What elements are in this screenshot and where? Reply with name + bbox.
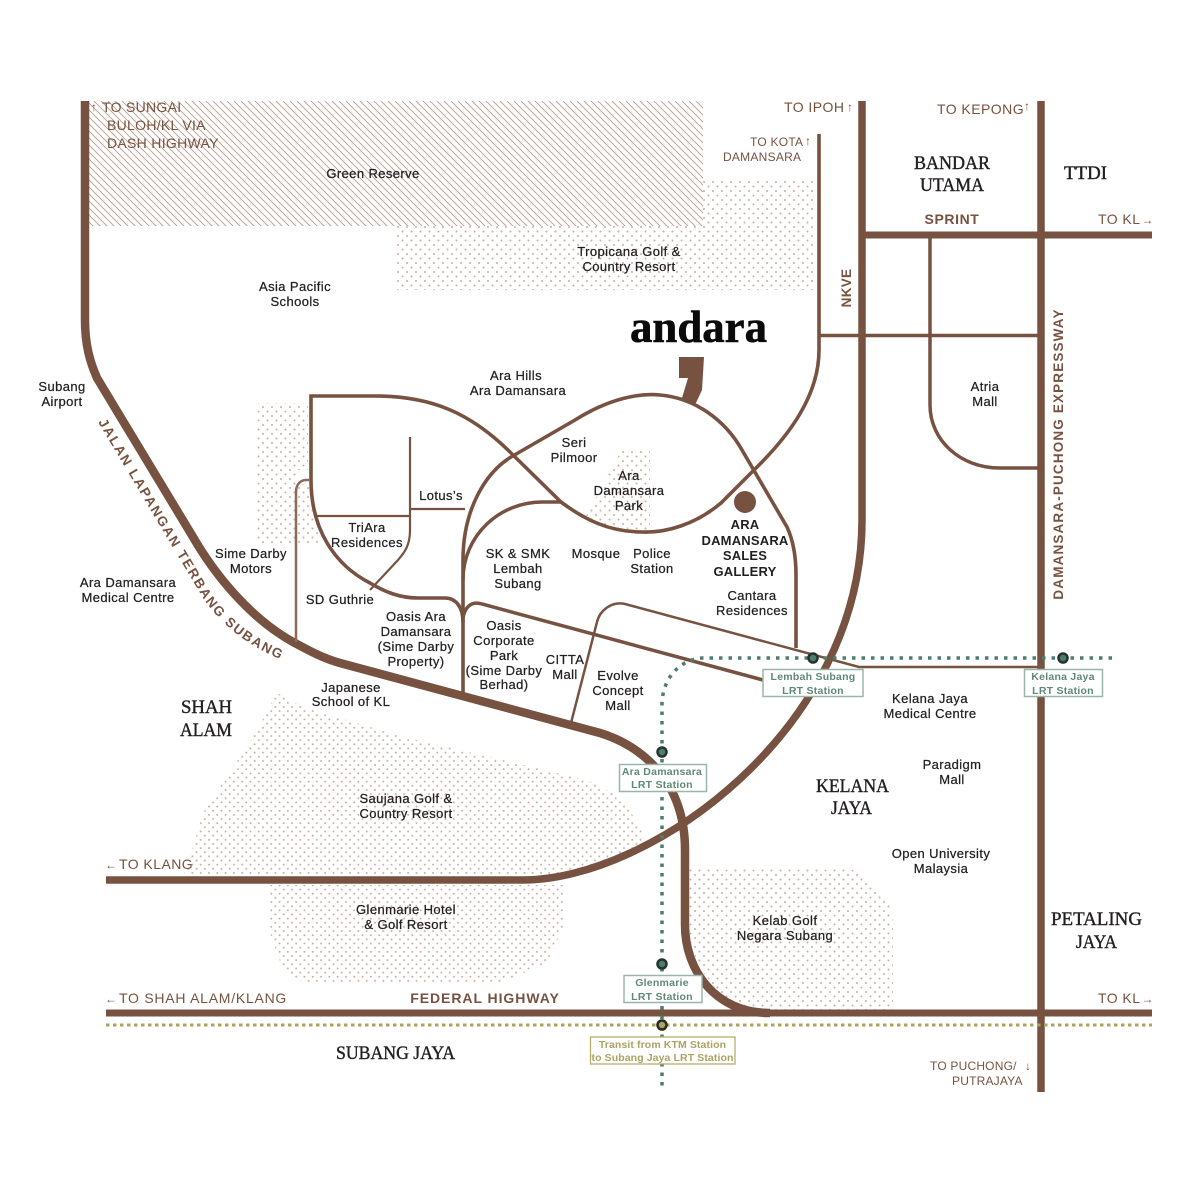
road: Sprint [862,232,1152,238]
station: Glenmarie [624,960,702,1003]
place: Japanese School: Japanese [321,680,381,695]
station: KTM transit [590,1020,735,1064]
place: Kelab Golf: Kelab Golf [753,913,817,928]
station: Kelana Jaya [1024,654,1102,697]
place: Cantara: Cantara [727,588,777,603]
place: Kelab Golf: Negara Subang [737,928,833,943]
station: Kelana Jaya: Kelana Jaya [1031,671,1095,683]
station: Lembah Subang: Lembah Subang [771,671,855,683]
road: east-west connector [819,334,1041,337]
label: to Kota Damansara: TO KOTA [750,135,803,149]
place: Cantara: Residences [716,603,788,618]
label: to Sungai Buloh: ↑ [91,100,97,114]
place: Green Reserve: Green Reserve [326,166,420,181]
label: to Klang: ← [105,858,117,872]
place: Sales Gallery: ARA [731,517,760,532]
label: to Shah Alam/Klang: TO SHAH ALAM/KLANG [119,990,287,1006]
place: CITTA Mall: Mall [552,667,578,682]
place: Oasis Corporate Park: Oasis [486,618,522,633]
district: Kelana Jaya [816,776,889,819]
place: Mosque: Mosque [572,546,620,561]
place: Asia Pacific Schools: Schools [270,294,320,309]
label: to Klang: TO KLANG [119,856,193,872]
icon: sales gallery dot [734,491,756,513]
icon: andara location marker [679,357,704,405]
road: TriAra horizontal [315,515,410,517]
title: andara: andara [630,301,767,352]
place: Kelana Jaya Medical: Kelana Jaya [892,691,968,706]
place: Seri Pilmoor: Seri [562,435,586,450]
place: Oasis Corporate Park: Park [490,648,518,663]
road: Ara Damansara loop [463,395,796,693]
place: SK SMK: Subang [494,576,542,591]
place: Evolve: Concept [592,683,644,698]
road: left highway [85,101,770,1013]
area: dots between link road and TriAra [298,484,322,545]
road: Evolve link [571,603,1041,723]
label: to Puchong: PUTRAJAYA [952,1074,1023,1088]
label: Sprint: SPRINT [925,211,979,227]
station: KTM transit: to Subang Jaya LRT Station [591,1052,734,1064]
place: Ara Damansara Park: Park [615,498,643,513]
road: inner arc [463,502,561,580]
station: KTM transit: Transit from KTM Station [599,1039,726,1051]
roads network [85,101,1152,1092]
area: ara damansara park dots [585,449,650,530]
place labels [38,166,1000,943]
label: Federal Highway: FEDERAL HIGHWAY [410,990,560,1006]
place: Paradigm Mall: Mall [939,772,965,787]
place: Lotus's: Lotus’s [419,488,463,503]
place: TriAra: Residences [331,535,403,550]
place: CITTA Mall: CITTA [546,652,584,667]
label: to Sungai Buloh: DASH HIGHWAY [107,135,219,151]
place: Kelana Jaya Medical: Medical Centre [883,706,977,721]
place: Ara Hills: Ara Damansara [470,383,566,398]
station: Ara Damansara: LRT Station [631,779,693,791]
district: TTDI: TTDI [1064,163,1107,184]
place: Asia Pacific Schools: Asia Pacific [259,279,331,294]
place: Sales Gallery: DAMANSARA [701,533,789,548]
road: Lotus's link [410,508,465,510]
road: to Klang and NKVE curve [106,101,862,880]
district: Petaling Jaya: JAYA [1076,932,1117,953]
road: link to Lembah Subang [463,603,763,680]
road labels and directions [91,99,1154,1088]
district: Bandar Utama [914,153,990,196]
place: Oasis Ara Damansara: Property) [387,654,445,669]
label: to Sungai Buloh: TO SUNGAI [102,99,181,115]
area: glenmarie golf dots [269,885,563,982]
place: Saujana: Saujana Golf & [359,791,453,806]
road: federal highway [106,1010,1152,1016]
district: Kelana Jaya: KELANA [816,776,889,797]
road: TriAra inner road [370,437,410,590]
place: Glenmarie Hotel: & Golf Resort [364,917,448,932]
area: left dots beside TriAra [256,403,308,545]
place: Oasis Corporate Park: (Sime Darby [466,663,542,678]
place: Sales Gallery: SALES [723,548,767,563]
place: Open University: Open University [892,846,990,861]
label: to Shah Alam/Klang: ← [105,992,118,1006]
place: Atria Mall: Atria [971,379,1000,394]
area: saujana golf dots [183,693,643,877]
district: Shah Alam [180,697,232,741]
district: Kelana Jaya: JAYA [831,798,872,819]
place: Ara Damansara Park: Damansara [594,483,665,498]
place: Ara Damansara Medical: Ara Damansara [80,575,176,590]
place: Japanese School: School of KL [312,694,390,709]
label: to Sungai Buloh: BULOH/KL VIA [107,117,206,133]
label: to Ipoh: ↑ [847,100,853,114]
place: Glenmarie Hotel: Glenmarie Hotel [356,902,456,917]
district: Shah Alam: SHAH [181,697,232,718]
label: NKVE: NKVE [839,269,854,307]
LRT line green dotted [662,658,1112,1088]
place: Oasis Corporate Park: Corporate [473,633,535,648]
place: Seri Pilmoor: Pilmoor [551,450,598,465]
label: to Kota Damansara: DAMANSARA [723,150,801,164]
place: Evolve: Evolve [597,668,639,683]
station: Lembah Subang: LRT Station [782,685,844,697]
label: to Puchong: TO PUCHONG/ [930,1059,1017,1073]
label: to Puchong: ↓ [1025,1059,1031,1073]
place: Subang Airport: Airport [41,394,83,409]
place: TriAra: TriAra [348,520,386,535]
place: Atria Mall: Mall [972,394,998,409]
district: Bandar Utama: BANDAR [914,153,990,174]
label: expressway: DAMANSARA-PUCHONG EXPRESSWAY [1051,308,1066,600]
road: Atria loop [930,235,1041,468]
district: Petaling Jaya [1051,909,1142,953]
place: Ara Damansara Park: Ara [618,468,640,483]
station: Ara Damansara [620,748,706,792]
road: Kota Damansara connector loop [311,134,819,622]
place: Saujana: Country Resort [359,806,453,821]
place: Sime Darby Motors: Motors [230,561,272,576]
label: to KL upper: TO KL→ [1098,211,1154,227]
place: Sales Gallery: GALLERY [713,564,777,579]
road: SD Guthrie link [296,480,309,642]
place: Ara Damansara Medical: Medical Centre [81,590,175,605]
place: Sime Darby Motors: Sime Darby [215,546,287,561]
station: Glenmarie: Glenmarie [635,977,689,989]
label: to KL lower: TO KL→ [1098,990,1154,1006]
label: to Ipoh: TO IPOH [784,99,844,115]
area: kelab golf dots [689,867,893,1010]
label: Jalan Lapangan Terbang Subang: JALAN LAPANGAN TERBANG SUBANG [99,420,282,658]
label: to Kepong: TO KEPONG [937,101,1024,117]
place: Oasis Ara Damansara: (Sime Darby [378,639,454,654]
label: to Kepong: ↑ [1024,99,1030,113]
place: Open University: Malaysia [914,861,969,876]
area: tropicana golf dots [396,181,815,290]
station: Ara Damansara: Ara Damansara [622,766,702,778]
KTM line yellow dotted [106,1024,1152,1026]
place: Ara Hills: Ara Hills [490,368,542,383]
area: green reserve hatch [89,101,703,226]
place: Oasis Ara Damansara: Damansara [381,624,452,639]
place: Evolve: Mall [605,698,631,713]
station: Glenmarie: LRT Station [631,991,693,1003]
place: Police Station: Police [633,546,671,561]
district labels [180,153,1142,1064]
place: Subang Airport: Subang [38,379,86,394]
station: Lembah Subang [763,654,863,697]
district: Shah Alam: ALAM [180,720,232,741]
district: Subang Jaya: SUBANG JAYA [336,1043,455,1064]
place: SK SMK: Lembah [493,561,543,576]
district: Petaling Jaya: PETALING [1051,909,1142,930]
place: SD Guthrie: SD Guthrie [306,592,374,607]
place: Oasis Ara Damansara: Oasis Ara [386,609,446,624]
place: SK SMK: SK & SMK [486,546,550,561]
label: to Kota Damansara: ↑ [805,134,811,148]
place: Tropicana: Country Resort [582,259,676,274]
road: Damansara-Puchong expressway [1037,101,1045,1092]
place: Paradigm Mall: Paradigm [923,757,981,772]
place: Oasis Corporate Park: Berhad) [479,677,529,692]
place: Police Station: Station [630,561,674,576]
district: Bandar Utama: UTAMA [920,175,984,196]
place: Tropicana: Tropicana Golf & [577,244,681,259]
station: Kelana Jaya: LRT Station [1032,685,1094,697]
